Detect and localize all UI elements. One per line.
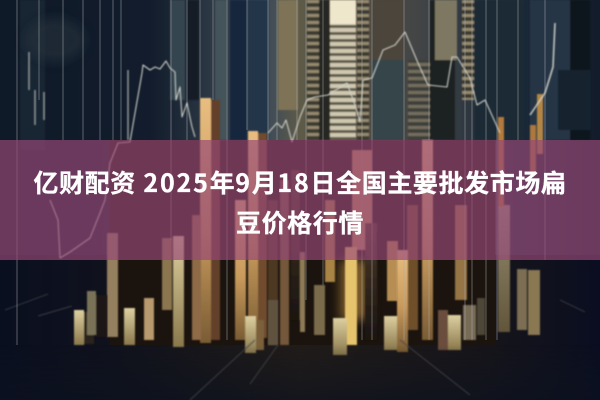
gold bar chart columns xyxy=(107,94,543,347)
title: 亿财配资 2025年9月18日全国主要批发市场扁 xyxy=(33,164,567,200)
vertical gridlines xyxy=(17,0,545,345)
floor fade and reflections xyxy=(0,294,600,400)
soft glow xyxy=(25,18,370,320)
title: 豆价格行情 xyxy=(236,210,364,238)
price line chart xyxy=(29,23,555,258)
blurred skyscrapers xyxy=(20,0,590,150)
title xyxy=(33,164,567,238)
foreground pillars xyxy=(74,250,485,355)
title band xyxy=(0,140,600,260)
